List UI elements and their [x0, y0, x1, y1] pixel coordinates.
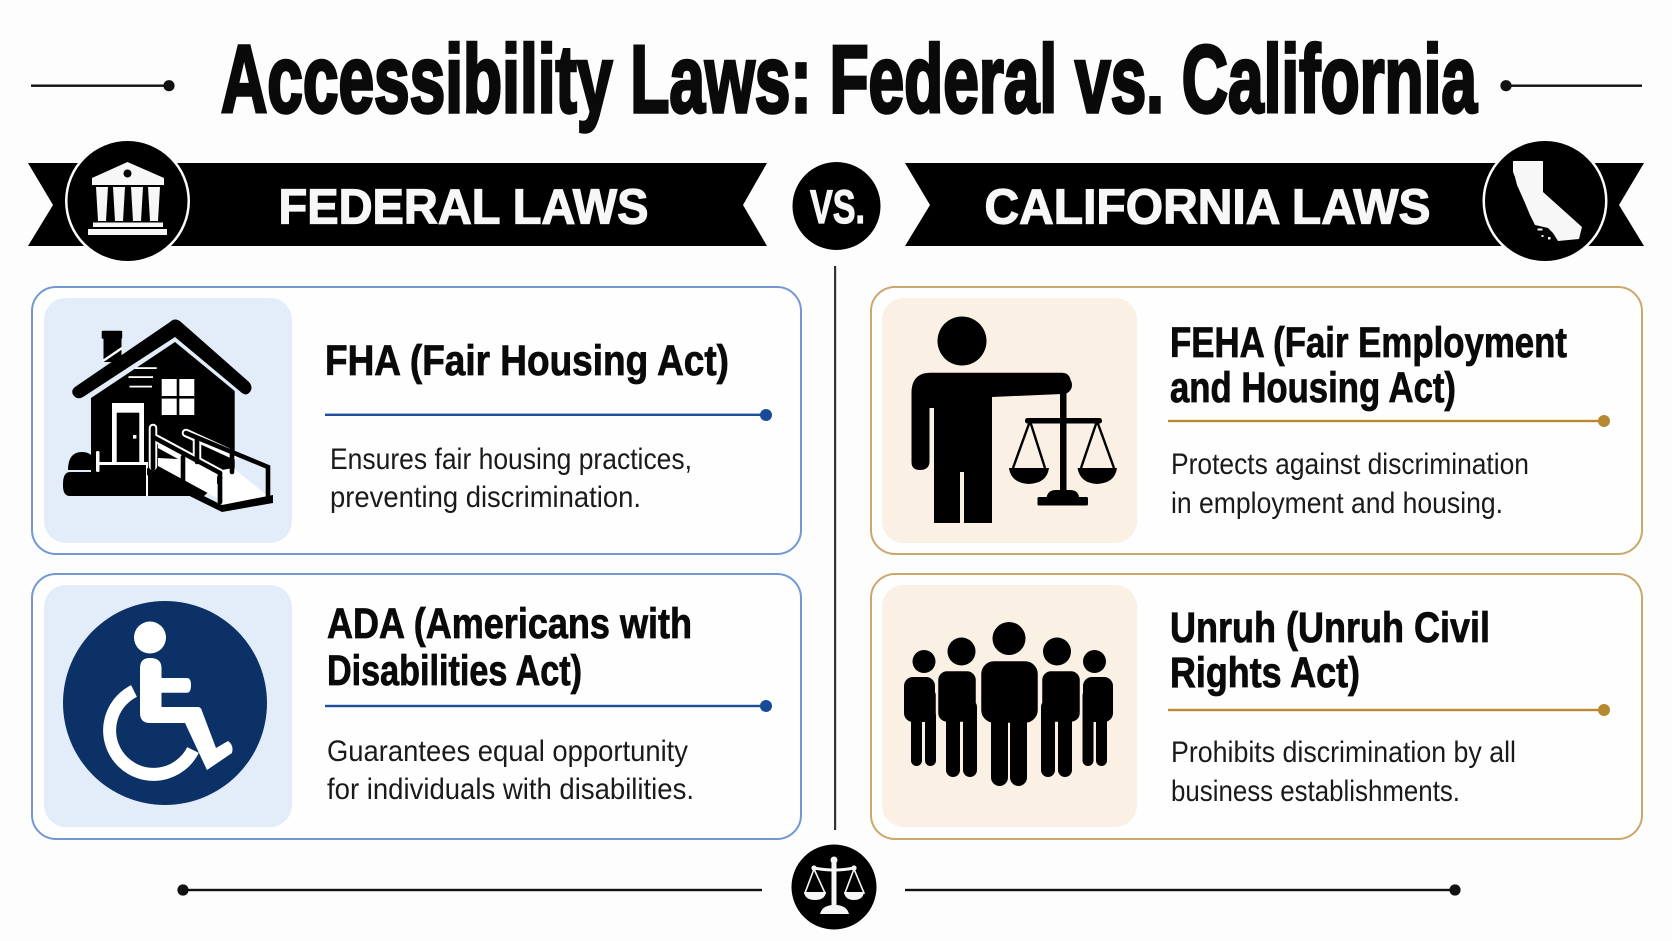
icon: courthouse: [65, 138, 190, 264]
icon tile: house: [44, 298, 292, 543]
ADA heading: ADA (Americans with: [327, 600, 692, 648]
title right ornament: [1500, 80, 1642, 91]
federal laws banner: [28, 138, 767, 264]
versus badge: [792, 162, 880, 250]
icon: wheelchair symbol: [63, 601, 267, 805]
icon tile: justice: [882, 298, 1137, 543]
ADA heading: Disabilities Act): [327, 647, 582, 695]
FEHA description: in employment and housing.: [1171, 487, 1503, 520]
Unruh heading: Unruh (Unruh Civil: [1170, 604, 1490, 652]
FHA rule: [325, 409, 772, 421]
versus badge: VS.: [810, 180, 865, 233]
FEHA description: Protects against discrimination: [1171, 448, 1529, 481]
icon tile: wheelchair: [44, 585, 292, 827]
icon: person holding scales: [912, 316, 1117, 523]
california laws banner: [905, 138, 1644, 264]
Unruh heading: Rights Act): [1170, 649, 1360, 697]
Unruh rule: [1168, 704, 1610, 716]
ADA description: for individuals with disabilities.: [327, 773, 694, 806]
panel: ADA: [32, 574, 801, 839]
icon: group of people: [904, 622, 1113, 786]
panel: FEHA: [871, 287, 1642, 554]
Unruh description: Prohibits discrimination by all: [1171, 736, 1516, 769]
center divider: [834, 266, 836, 830]
FEHA heading: and Housing Act): [1170, 364, 1456, 412]
footer scales badge: [792, 844, 876, 930]
footer left line: [177, 884, 762, 896]
federal banner label: FEDERAL LAWS: [278, 180, 648, 234]
title left ornament: [31, 80, 175, 91]
panel: Unruh: [871, 574, 1642, 839]
icon tile: group: [882, 585, 1137, 827]
Unruh description: business establishments.: [1171, 775, 1460, 808]
ADA description: Guarantees equal opportunity: [327, 735, 688, 768]
FHA heading: FHA (Fair Housing Act): [325, 337, 729, 385]
footer right line: [905, 884, 1461, 896]
icon: house with ramp: [63, 320, 273, 512]
california banner label: CALIFORNIA LAWS: [984, 180, 1430, 234]
FHA description: preventing discrimination.: [330, 481, 641, 514]
FEHA rule: [1168, 415, 1610, 427]
ADA rule: [325, 700, 772, 712]
FHA description: Ensures fair housing practices,: [330, 443, 692, 476]
icon: california state: [1482, 138, 1608, 264]
panel: FHA: [32, 287, 801, 554]
FEHA heading: FEHA (Fair Employment: [1170, 319, 1567, 367]
